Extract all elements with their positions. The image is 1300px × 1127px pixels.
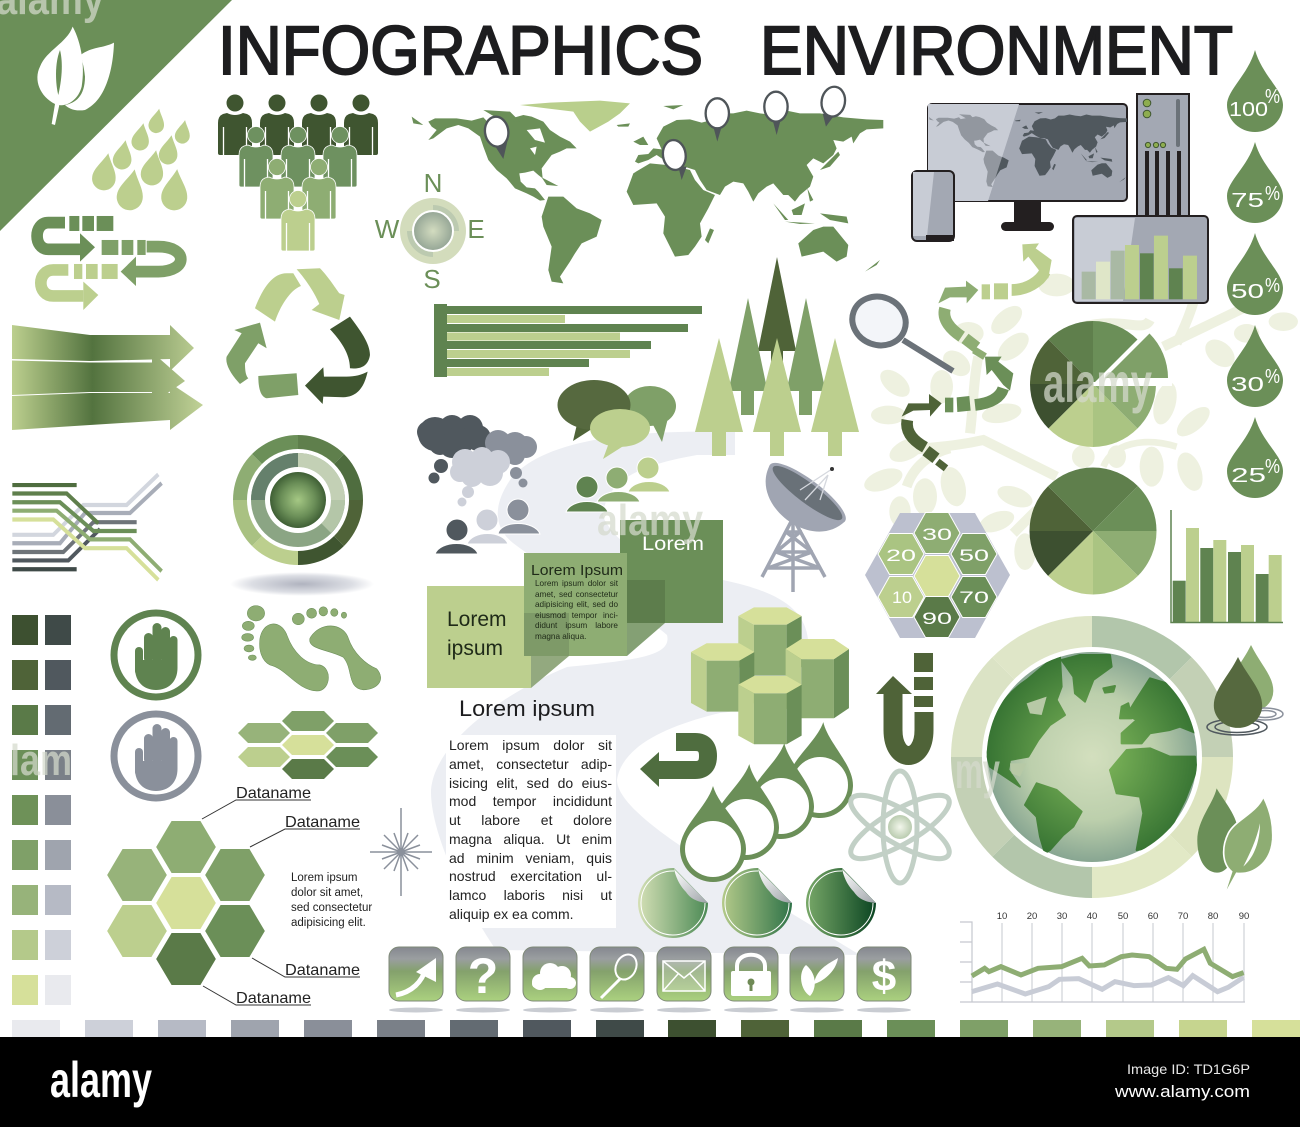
line chart: 60 (1148, 911, 1158, 922)
globe with ring (951, 616, 1233, 898)
line chart (960, 911, 1249, 1002)
tree background (861, 260, 1298, 570)
icon: dollar button: $ (872, 952, 896, 1001)
world map with pins (412, 85, 883, 283)
line chart: 90 (1239, 911, 1249, 922)
info boxes: ipsum (447, 637, 503, 660)
numbered hexagon cluster: 50 (959, 546, 989, 565)
icon: leaves button (801, 958, 838, 996)
devices: tablet with bars (1073, 216, 1208, 303)
watermarks: alamy (597, 496, 703, 545)
corner banner with leaf icon (0, 0, 232, 231)
icon: envelope button (663, 961, 705, 991)
greenland (520, 101, 630, 132)
percentage drops: 30 (1231, 374, 1264, 396)
footer bar: alamy (50, 1052, 152, 1108)
info boxes (427, 520, 723, 688)
watermarks: my (955, 743, 1000, 799)
percentage drops: 25 (1231, 465, 1266, 487)
hexagon diagram with data labels (106, 785, 360, 1007)
box body text: amet, sed consectetur (535, 590, 618, 599)
percentage drops: 50 (1231, 281, 1264, 303)
box body text: Lorem ipsum dolor sit (535, 579, 618, 588)
numbered hexagon cluster: 20 (886, 546, 916, 565)
icon: arrow button (396, 958, 436, 995)
hexagon caption: sed consectetur (291, 902, 372, 914)
peeling stickers (638, 868, 876, 938)
compass: E (467, 214, 485, 244)
gradient arrows (12, 325, 203, 430)
recycling arrows (226, 268, 370, 404)
icon: magnifier button (601, 951, 641, 998)
compass (375, 168, 485, 294)
footer bar (0, 1037, 1300, 1127)
ring shadow (230, 572, 374, 596)
main text block: amet, consectetur adip- (449, 756, 612, 772)
icon: star (370, 808, 432, 896)
icon: people pyramid (218, 94, 378, 251)
line chart: 70 (1178, 911, 1188, 922)
compass: S (423, 264, 441, 294)
hexagon caption: adipisicing elit. (291, 917, 366, 929)
main text block: ut labore et dolore (449, 812, 612, 828)
ring drops (680, 720, 856, 882)
line chart: 40 (1087, 911, 1097, 922)
snake arrows (902, 243, 1052, 468)
icon: question button: ? (468, 948, 498, 1004)
line chart: 80 (1208, 911, 1218, 922)
percentage drops: % (1265, 366, 1280, 388)
column chart (1171, 510, 1283, 622)
icon: leaves (37, 27, 114, 125)
watermarks: lam (10, 736, 72, 785)
devices: phone (912, 171, 954, 241)
box body text: magna aliqua. (535, 632, 586, 641)
icon: green user group (566, 457, 670, 512)
icon: lock button (731, 955, 771, 996)
percentage drops: % (1265, 456, 1280, 478)
line chart: 30 (1057, 911, 1067, 922)
footer bar: Image ID: TD1G6P (1127, 1061, 1250, 1077)
numbered hexagon cluster: 10 (892, 588, 912, 607)
info boxes: Lorem (447, 608, 507, 631)
numbered hexagon cluster (865, 512, 1010, 638)
pie chart (1030, 468, 1156, 594)
hexagon diagram with data labels: Dataname (236, 785, 311, 802)
main text block: isicing elit, sed do eius- (449, 775, 612, 791)
target ring (233, 435, 363, 565)
U-turn arrow left (640, 742, 708, 787)
icon: magnifier (845, 289, 953, 371)
hexagon diagram with data labels: Dataname (236, 990, 311, 1007)
icon: atom (843, 771, 957, 883)
colour swatches: left column (12, 615, 71, 1005)
line chart: 10 (997, 911, 1007, 922)
title: INFOGRAPHICS (218, 12, 703, 89)
icon: grey stop hand (114, 714, 198, 798)
hexagon caption: Lorem ipsum (291, 872, 357, 884)
main text block: magna aliqua. Ut enim (449, 831, 612, 847)
main text block: mod tempor incididunt (449, 793, 612, 809)
icon: water drop with ripples (1207, 645, 1283, 735)
info boxes: Lorem Ipsum (531, 563, 623, 579)
percentage drops: % (1265, 86, 1280, 108)
footer bar: www.alamy.com (1114, 1082, 1250, 1101)
numbered hexagon cluster: 30 (922, 525, 952, 544)
percentage drops: 75 (1231, 190, 1264, 212)
box body text (535, 579, 618, 641)
watermarks (0, 0, 1152, 799)
compass: W (375, 214, 400, 244)
exploded pie chart (1030, 321, 1172, 447)
bottom colour strip (12, 1020, 1300, 1037)
icon: thought clouds (417, 415, 537, 506)
title: ENVIRONMENT (760, 12, 1233, 89)
main text block: lamco laboris nisi ut (449, 887, 612, 903)
main text block: Lorem ipsum dolor sit (449, 737, 612, 753)
icon: two leaves (1197, 788, 1273, 898)
road background (431, 432, 860, 955)
percentage drops: % (1265, 183, 1280, 205)
percentage drops: 100 (1229, 99, 1268, 121)
icon: forest (695, 257, 859, 456)
icon: grey user group (435, 499, 540, 554)
box body text: eiusmod tempor inci- (535, 611, 618, 620)
hexagon diagram with data labels: Dataname (285, 814, 360, 831)
icon: satellite dish (750, 454, 853, 592)
looped arrows (37, 216, 181, 310)
main text block: aliquip ex ea comm. (449, 906, 574, 922)
main text block: nostrud exercitation ul- (449, 868, 612, 884)
percentage drops: % (1265, 275, 1280, 297)
main text block: ad minim veniam, quis (449, 850, 612, 866)
U-turn arrow up (876, 653, 933, 756)
hexagon caption (291, 872, 372, 929)
compass: N (424, 168, 442, 198)
text heading: Lorem ipsum (459, 696, 595, 721)
title (218, 12, 1233, 89)
icon: speech bubbles (558, 380, 676, 459)
map pins (483, 85, 847, 180)
icon: rain drops (90, 107, 192, 212)
info boxes: Lorem (642, 534, 704, 555)
icon: green stop hand (114, 613, 198, 697)
icon buttons row (389, 947, 911, 1012)
3D hexagon prisms (691, 607, 849, 744)
box body text: didunt ipsum labore (535, 621, 618, 630)
icon: footprints (242, 606, 381, 691)
small hexagon group (238, 711, 378, 779)
hexagon diagram with data labels: Dataname (285, 962, 360, 979)
icon: cloud button (532, 963, 576, 990)
devices: server tower (1137, 94, 1189, 218)
main text block (449, 737, 612, 922)
percentage drops (1227, 50, 1283, 498)
circuit-style wires (12, 474, 162, 580)
line chart: 20 (1027, 911, 1037, 922)
numbered hexagon cluster: 90 (922, 609, 952, 628)
hexagon caption: dolor sit amet, (291, 887, 363, 899)
horizontal bar chart (434, 304, 702, 377)
numbered hexagon cluster: 70 (959, 588, 989, 607)
watermarks: alamy (1043, 351, 1152, 414)
line chart: 50 (1118, 911, 1128, 922)
box body text: adipisicing elit, sed do (535, 600, 618, 609)
devices: monitor (928, 104, 1127, 231)
